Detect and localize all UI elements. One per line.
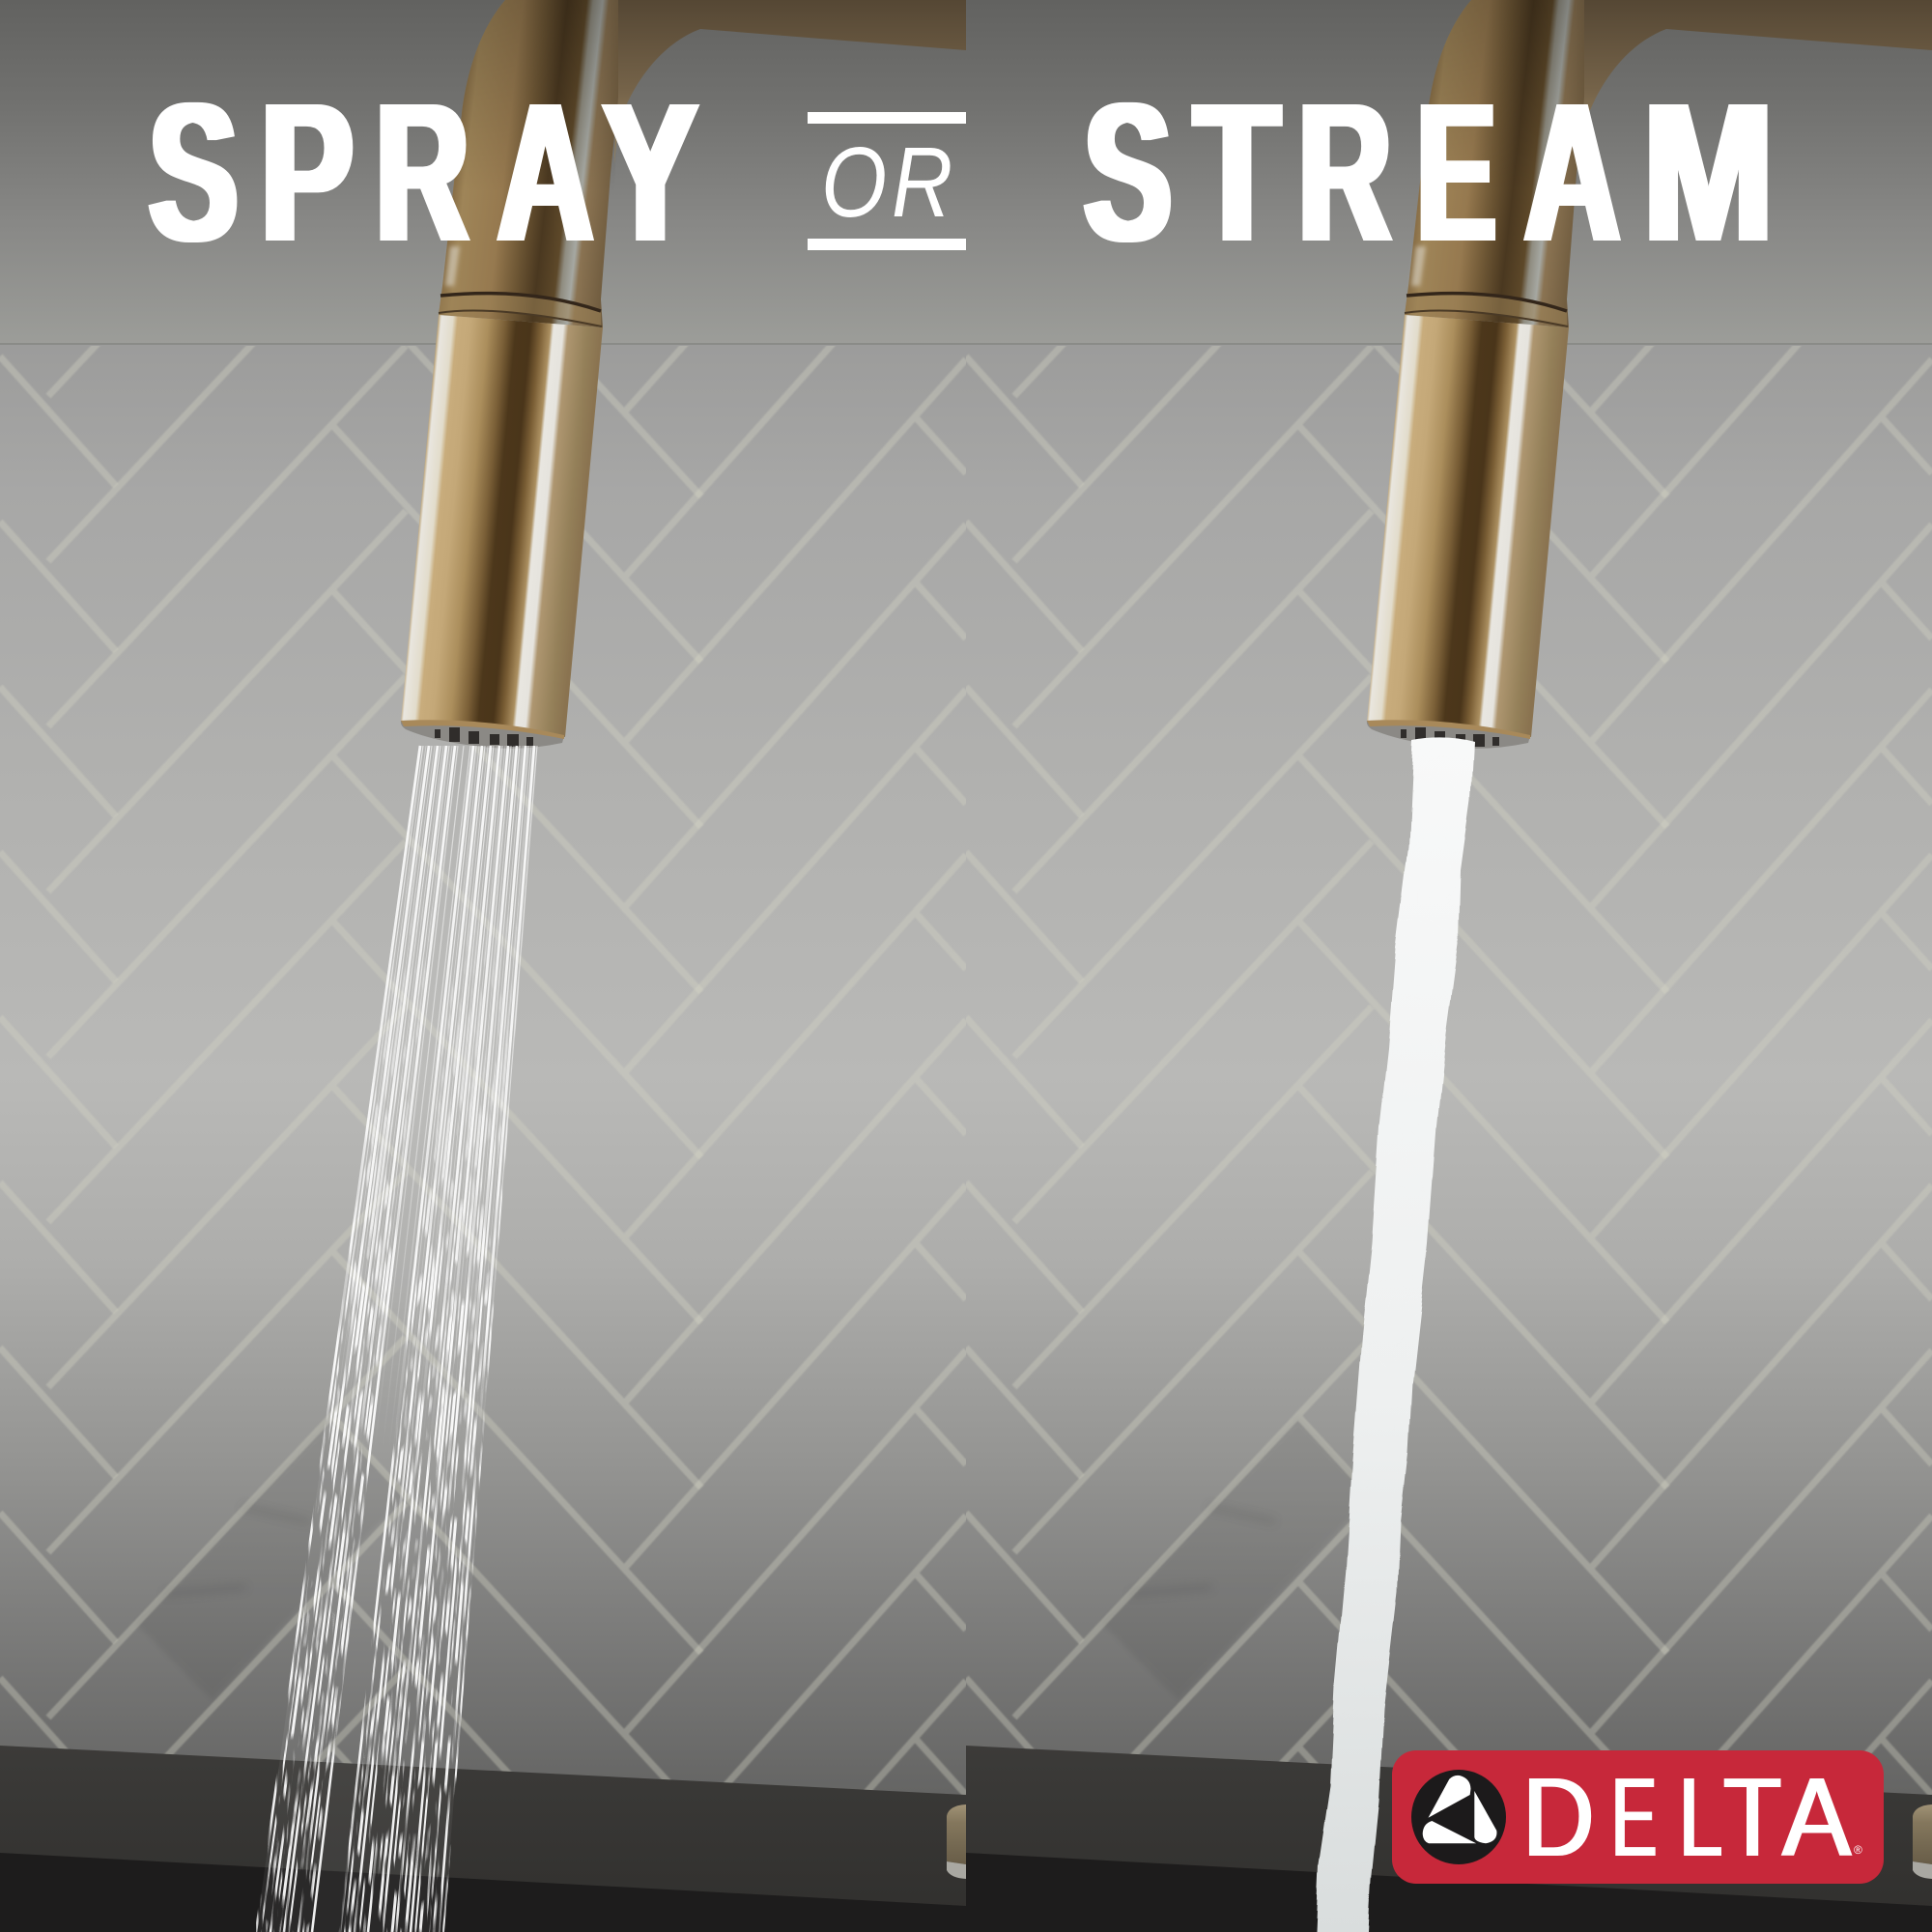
title: SPRAY: R xyxy=(375,62,469,283)
title: STREAM: M xyxy=(1643,62,1774,283)
title: STREAM: R xyxy=(1298,62,1391,283)
wordmark: DELTA: L xyxy=(1679,1754,1722,1880)
panel: stream photo xyxy=(966,0,1932,1932)
wordmark: DELTA: T xyxy=(1723,1754,1781,1880)
title: SPRAY: A xyxy=(497,62,593,283)
title: STREAM: T xyxy=(1194,62,1279,283)
divider: OR with rules xyxy=(808,112,966,250)
wordmark: DELTA: E xyxy=(1611,1754,1657,1880)
title: STREAM: S xyxy=(1084,62,1172,283)
divider: OR with rules: O xyxy=(821,127,887,238)
water spray xyxy=(256,746,537,1932)
title: SPRAY: P xyxy=(261,62,353,283)
panel: spray photo xyxy=(0,0,966,1932)
icon: Delta triangle mark xyxy=(1411,1770,1506,1864)
title: STREAM xyxy=(1084,62,1774,283)
divider: OR with rules: R xyxy=(892,127,952,238)
registered mark: ® xyxy=(1854,1843,1862,1857)
title: STREAM: E xyxy=(1417,62,1495,283)
title: SPRAY: S xyxy=(149,62,238,283)
logo: Delta badge xyxy=(1392,1750,1884,1884)
title: SPRAY: Y xyxy=(603,62,697,283)
wordmark: DELTA xyxy=(1522,1754,1853,1880)
title: SPRAY xyxy=(149,62,699,283)
title: STREAM: A xyxy=(1524,62,1620,283)
water stream xyxy=(1316,737,1473,1932)
wordmark: DELTA: D xyxy=(1522,1754,1595,1880)
wordmark: DELTA: A xyxy=(1781,1754,1851,1880)
